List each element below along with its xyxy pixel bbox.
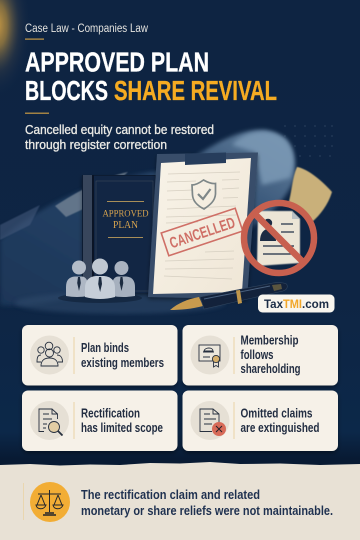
panel: conclusion: The rectification claim and related xyxy=(81,487,260,502)
subtitle xyxy=(25,122,214,152)
clipboard clip xyxy=(185,152,226,165)
title: BLOCKS xyxy=(25,75,108,106)
icon: shield check xyxy=(192,180,216,209)
card: omitted claims are extinguished: are extinguished xyxy=(240,420,320,435)
icon: document with magnifier xyxy=(39,409,62,436)
logo: TaxTMI.com: .com xyxy=(302,299,329,311)
card: plan binds existing members: Plan binds xyxy=(81,340,129,355)
card: plan binds existing members: existing members xyxy=(81,355,164,370)
card: membership follows shareholding: follows xyxy=(240,347,274,362)
card: omitted claims are extinguished: Omitted claims xyxy=(240,406,312,420)
dot pattern xyxy=(284,125,333,157)
card: membership follows shareholding xyxy=(182,325,338,386)
icon: members xyxy=(37,342,62,366)
title: SHARE REVIVAL xyxy=(114,75,277,106)
title: APPROVED PLAN xyxy=(25,46,209,78)
card: plan binds existing members xyxy=(22,325,178,386)
clipboard with document xyxy=(148,152,258,299)
icon: certificate xyxy=(199,345,220,367)
logo: TaxTMI.com: Tax xyxy=(264,299,284,311)
stamp: cancelled: CANCELLED xyxy=(168,215,237,252)
logo: TaxTMI.com xyxy=(258,294,334,312)
subtitle: through register correction xyxy=(25,137,167,152)
panel: conclusion xyxy=(0,462,360,540)
document lines xyxy=(164,172,240,279)
card: omitted claims are extinguished xyxy=(182,390,338,451)
pen xyxy=(170,283,287,310)
card: rectification has limited scope: has limited scope xyxy=(81,420,163,435)
prohibited document icon xyxy=(244,203,314,273)
icon: scales xyxy=(30,482,70,522)
stamp: cancelled xyxy=(161,208,243,256)
book: approved plan: APPROVED xyxy=(102,210,149,220)
eyebrow: Case Law - Companies Law xyxy=(25,23,149,35)
icon: three people xyxy=(58,258,142,303)
card: membership follows shareholding: shareholding xyxy=(240,361,300,376)
book: approved plan xyxy=(82,175,156,293)
brush stroke backdrop xyxy=(0,130,332,314)
card: rectification has limited scope xyxy=(22,390,178,451)
subtitle: Cancelled equity cannot be restored xyxy=(25,122,214,137)
logo: TaxTMI.com: TMI xyxy=(283,299,302,311)
icon: document with cross xyxy=(200,409,226,436)
book: approved plan: PLAN xyxy=(113,220,138,231)
card: membership follows shareholding: Membership xyxy=(240,332,299,348)
title xyxy=(25,46,277,106)
card: rectification has limited scope: Rectification xyxy=(81,406,140,420)
